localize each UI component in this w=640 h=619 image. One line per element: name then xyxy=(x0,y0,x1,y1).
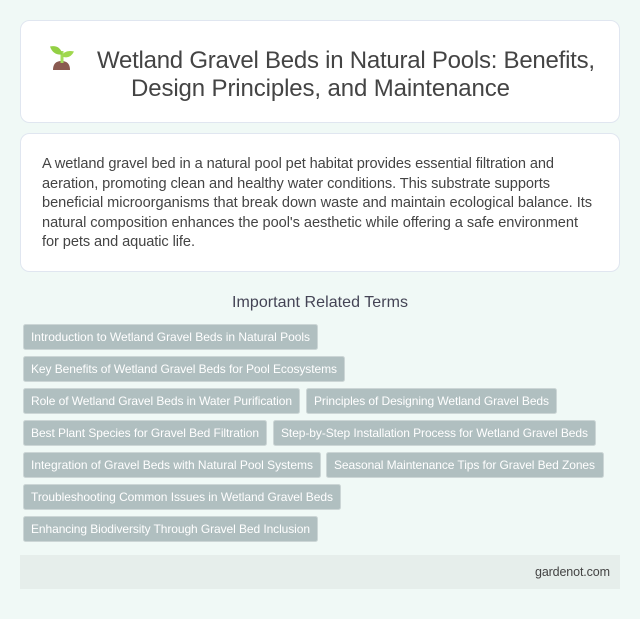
footer xyxy=(20,555,620,589)
tag: Introduction to Wetland Gravel Beds in Natural Pools xyxy=(31,330,310,344)
tag list xyxy=(24,324,604,542)
panel: header xyxy=(20,20,620,122)
tag: Best Plant Species for Gravel Bed Filtration xyxy=(31,426,259,440)
description text: A wetland gravel bed in a natural pool pet habitat provides essential filtration and xyxy=(42,156,554,172)
description text: beneficial microorganisms that break down waste and maintain ecological balance. Its xyxy=(42,195,592,211)
icon: seedling xyxy=(50,46,74,70)
tag: Seasonal Maintenance Tips for Gravel Bed Zones xyxy=(334,458,595,472)
tag xyxy=(24,452,320,478)
description text: for pets and aquatic life. xyxy=(42,234,195,250)
tag xyxy=(24,420,266,446)
tag: Integration of Gravel Beds with Natural Pool Systems xyxy=(31,458,313,472)
tag xyxy=(306,388,556,414)
description text xyxy=(42,156,592,250)
description text: natural composition enhances the pool's aesthetic while offering a safe environment xyxy=(42,215,578,231)
footer: gardenot.com xyxy=(535,565,610,579)
tag xyxy=(24,516,318,542)
panel: description xyxy=(20,134,620,272)
title: Wetland Gravel Beds in Natural Pools: Benefits, xyxy=(97,47,595,74)
tag xyxy=(326,452,604,478)
tag: Troubleshooting Common Issues in Wetland Gravel Beds xyxy=(31,490,333,504)
tag: Step-by-Step Installation Process for Wetland Gravel Beds xyxy=(281,426,588,440)
tag xyxy=(274,420,596,446)
title: Design Principles, and Maintenance xyxy=(131,75,510,102)
tag xyxy=(24,324,318,350)
tag xyxy=(24,388,300,414)
tag xyxy=(24,484,340,510)
tag: Principles of Designing Wetland Gravel Beds xyxy=(314,394,549,408)
tag: Enhancing Biodiversity Through Gravel Bed Inclusion xyxy=(31,522,310,536)
tag xyxy=(24,356,344,382)
tag: Key Benefits of Wetland Gravel Beds for Pool Ecosystems xyxy=(31,362,337,376)
title xyxy=(97,47,595,102)
tag: Role of Wetland Gravel Beds in Water Purification xyxy=(31,394,292,408)
description text: aeration, promoting clean and healthy water conditions. This substrate supports xyxy=(42,176,550,192)
heading: important related terms: Important Related Terms xyxy=(232,294,408,311)
